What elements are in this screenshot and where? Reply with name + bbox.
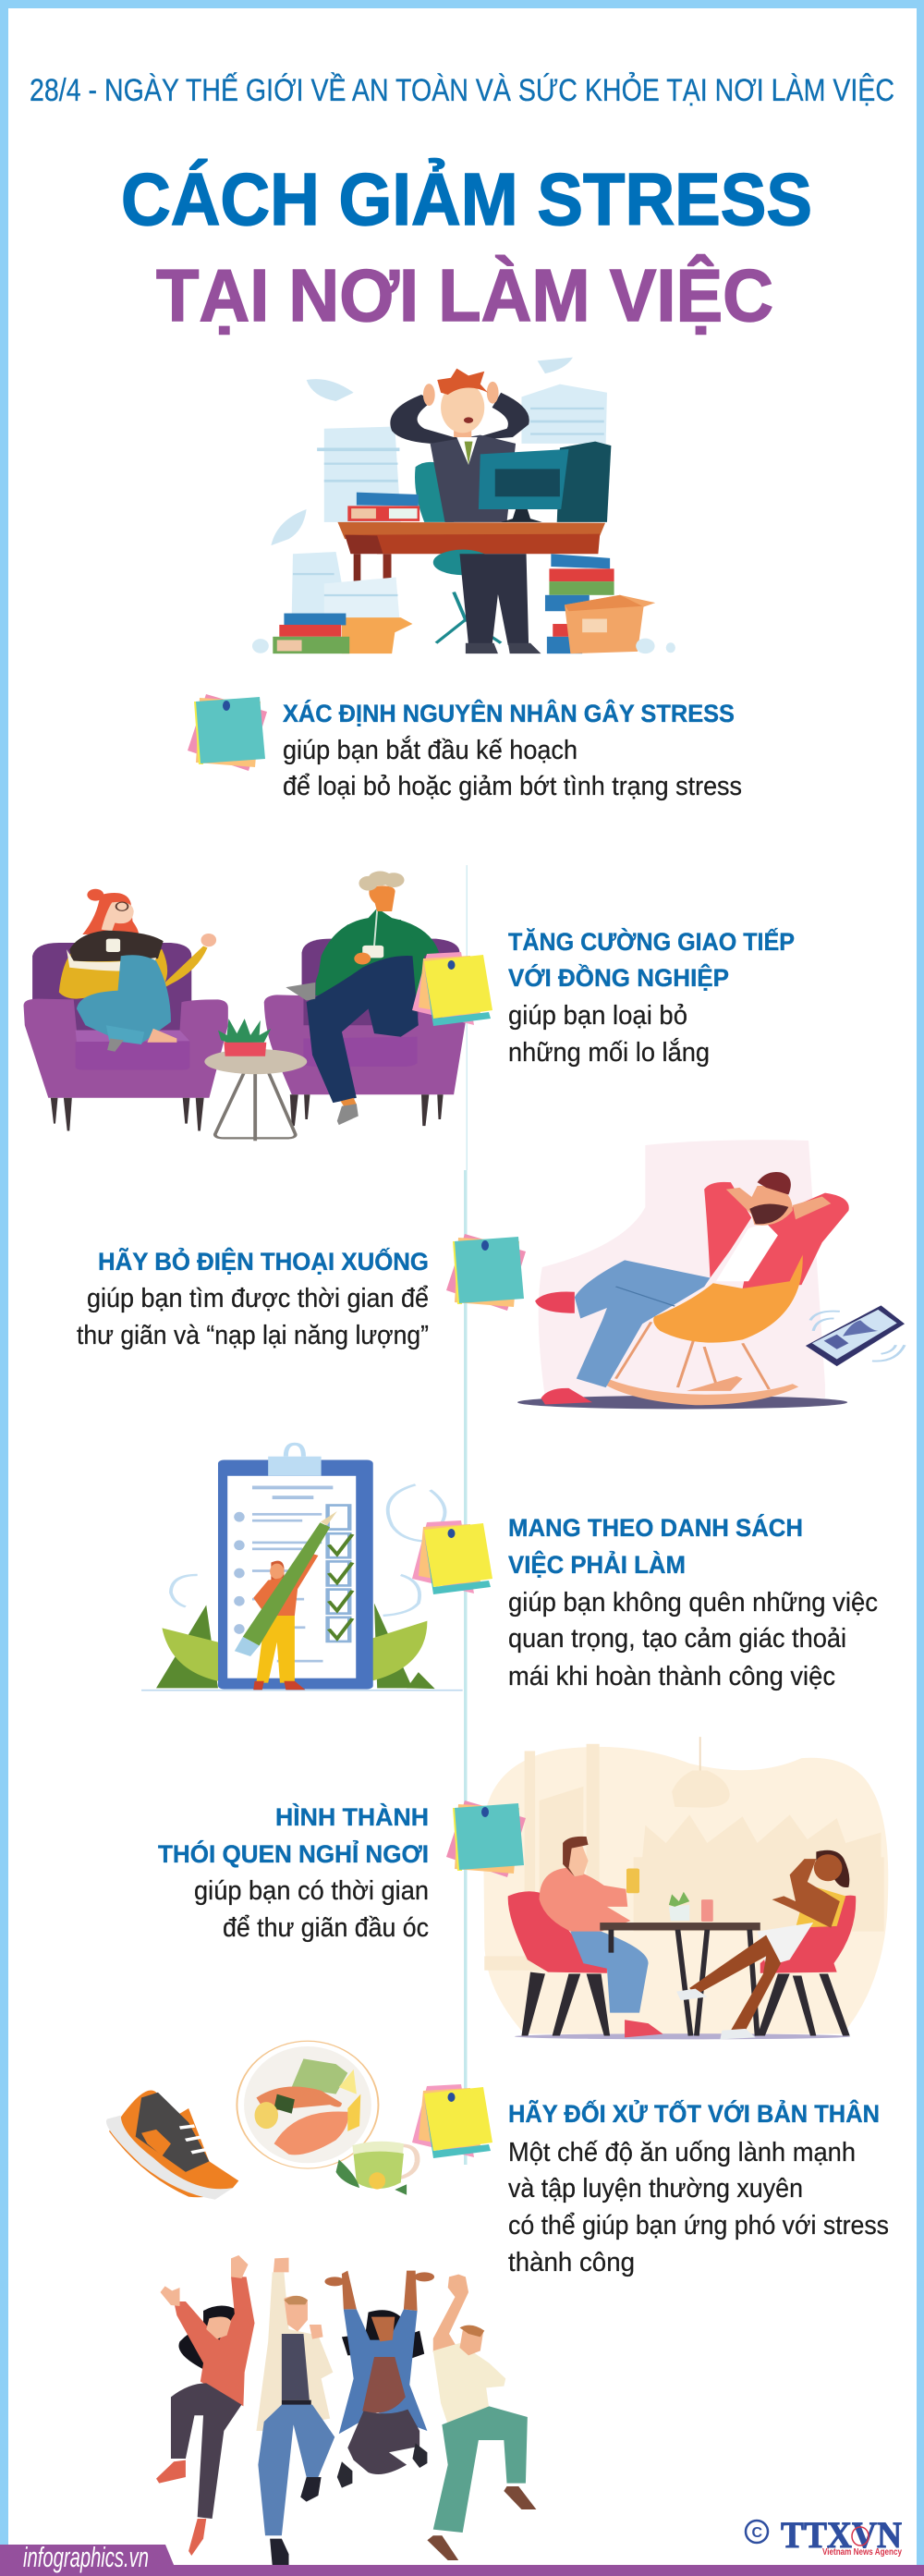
- tip 3: put down the phone: [77, 1234, 526, 1350]
- copyright logo TTXVN: Vietnam News Agency: [822, 2547, 902, 2558]
- tip 2 text: những mối lo lắng: [508, 1037, 710, 1068]
- left armchair: [24, 943, 228, 1131]
- sticky note: [188, 694, 267, 771]
- tip 3 text: HÃY BỎ ĐIỆN THOẠI XUỐNG: [98, 1246, 429, 1276]
- left chair: [508, 1891, 610, 2036]
- man in cream shirt: [427, 2275, 536, 2560]
- legs: [459, 554, 529, 645]
- leaves: [156, 1604, 435, 1689]
- woman sitting: [676, 1850, 849, 2039]
- man: [253, 1554, 318, 1690]
- illustration: stressed office worker: [252, 358, 675, 653]
- slippers: [535, 1291, 575, 1313]
- tip 1 text: giúp bạn bắt đầu kế hoạch: [283, 735, 578, 765]
- illustration: running shoe, salmon plate and herbal tea: [106, 2041, 418, 2200]
- sticky note: [446, 1234, 526, 1311]
- illustration: colleagues talking in armchairs: [24, 871, 466, 1141]
- copyright logo TTXVN: C: [752, 2525, 763, 2541]
- tip 5 text: để thư giãn đầu óc: [223, 1913, 429, 1943]
- monitor: [557, 442, 611, 522]
- pencil: [235, 1511, 337, 1656]
- binders on desk: [357, 493, 419, 506]
- woman: [59, 889, 216, 1052]
- illustration: clipboard checklist with man and pencil: [141, 1444, 463, 1691]
- footer bar: [0, 2541, 924, 2576]
- cafe background: [483, 1747, 888, 2034]
- timeline line: [464, 865, 468, 2165]
- illustration: four happy people jumping: [156, 2255, 536, 2565]
- tip 6 text: HÃY ĐỐI XỬ TỐT VỚI BẢN THÂN: [508, 2098, 880, 2128]
- tip 2 text: giúp bạn loại bỏ: [508, 1001, 687, 1031]
- clipboard: [218, 1460, 373, 1690]
- illustration: couple in cafe: [483, 1737, 888, 2039]
- tip 1 text: XÁC ĐỊNH NGUYÊN NHÂN GÂY STRESS: [283, 699, 735, 727]
- chair back: [415, 462, 454, 522]
- legs: [575, 1260, 711, 1387]
- tip 3 text: giúp bạn tìm được thời gian để: [87, 1284, 429, 1313]
- tip 6 text: và tập luyện thường xuyên: [508, 2174, 803, 2204]
- man upper body: [704, 1182, 751, 1277]
- tip 3 text: [77, 1246, 429, 1350]
- paper stacks and boxes left: [292, 552, 347, 616]
- title: [121, 158, 812, 336]
- tip 4 text: quan trọng, tạo cảm giác thoải: [508, 1624, 846, 1654]
- tip 4 text: giúp bạn không quên những việc: [508, 1588, 878, 1618]
- tip 6 text: [508, 2098, 889, 2277]
- sticky note: [412, 2084, 492, 2158]
- tip 6 text: Một chế độ ăn uống lành mạnh: [508, 2138, 856, 2167]
- checkboxes: [328, 1506, 349, 1642]
- phone: [806, 1305, 905, 1366]
- tip 5 text: HÌNH THÀNH: [275, 1802, 429, 1831]
- shoe: [106, 2090, 238, 2200]
- tip 4: carry a to-do list: [412, 1513, 878, 1691]
- binders and box right: [551, 554, 610, 568]
- illustration: man relaxing on rocking chair: [517, 1140, 905, 1409]
- right chair: [758, 1896, 856, 2036]
- tip 2: communicate with colleagues: [412, 927, 795, 1068]
- chair: [653, 1255, 803, 1343]
- title: CÁCH GIẢM STRESS: [121, 158, 812, 240]
- tip 6 text: có thể giúp bạn ứng phó với stress: [508, 2211, 889, 2240]
- tip 2 text: VỚI ĐỒNG NGHIỆP: [508, 963, 729, 992]
- tip 2 text: TĂNG CƯỜNG GIAO TIẾP: [508, 927, 795, 956]
- tip 6 text: thành công: [508, 2248, 635, 2277]
- man in cream blazer: [256, 2258, 334, 2565]
- rocker: [607, 1379, 798, 1405]
- tip 4 text: [508, 1513, 878, 1691]
- plant table: [204, 1019, 307, 1141]
- copyright logo TTXVN: TTXVN: [781, 2514, 902, 2556]
- tip 4 text: mái khi hoàn thành công việc: [508, 1662, 835, 1691]
- sticky note: [412, 1520, 492, 1594]
- chair base: [433, 550, 492, 575]
- tip 1: identify causes: [188, 694, 742, 801]
- plate: [237, 2041, 378, 2168]
- right armchair: [264, 939, 466, 1126]
- torso and raised arms: [390, 393, 529, 444]
- sticky note: [412, 952, 492, 1026]
- tip 5 text: THÓI QUEN NGHỈ NGƠI: [158, 1838, 429, 1868]
- tea cup: [336, 2142, 418, 2195]
- tip 6: treat yourself well: [412, 2084, 889, 2277]
- tip 4 text: MANG THEO DANH SÁCH: [508, 1513, 803, 1542]
- woman in blue jacket: [324, 2271, 434, 2488]
- tip 4 text: VIỆC PHẢI LÀM: [508, 1549, 686, 1579]
- tip 5: build a habit of resting: [158, 1801, 526, 1943]
- title: TẠI NƠI LÀM VIỆC: [156, 254, 773, 336]
- tip 1 text: để loại bỏ hoặc giảm bớt tình trạng stress: [283, 772, 742, 801]
- table: [600, 1892, 760, 2036]
- sticky note: [446, 1801, 526, 1877]
- man: [286, 871, 439, 1125]
- tip 3 text: thư giãn và “nạp lại năng lượng”: [77, 1321, 429, 1350]
- footer bar: infographics.vn: [23, 2541, 149, 2573]
- head: [423, 384, 435, 406]
- woman in red sweater: [156, 2255, 255, 2556]
- desk: [337, 522, 605, 539]
- tip 1 text: [283, 699, 742, 801]
- man sitting: [540, 1837, 663, 2037]
- tip 5 text: giúp bạn có thời gian: [194, 1876, 429, 1906]
- tip 2 text: [508, 927, 795, 1068]
- tip 5 text: [158, 1802, 429, 1943]
